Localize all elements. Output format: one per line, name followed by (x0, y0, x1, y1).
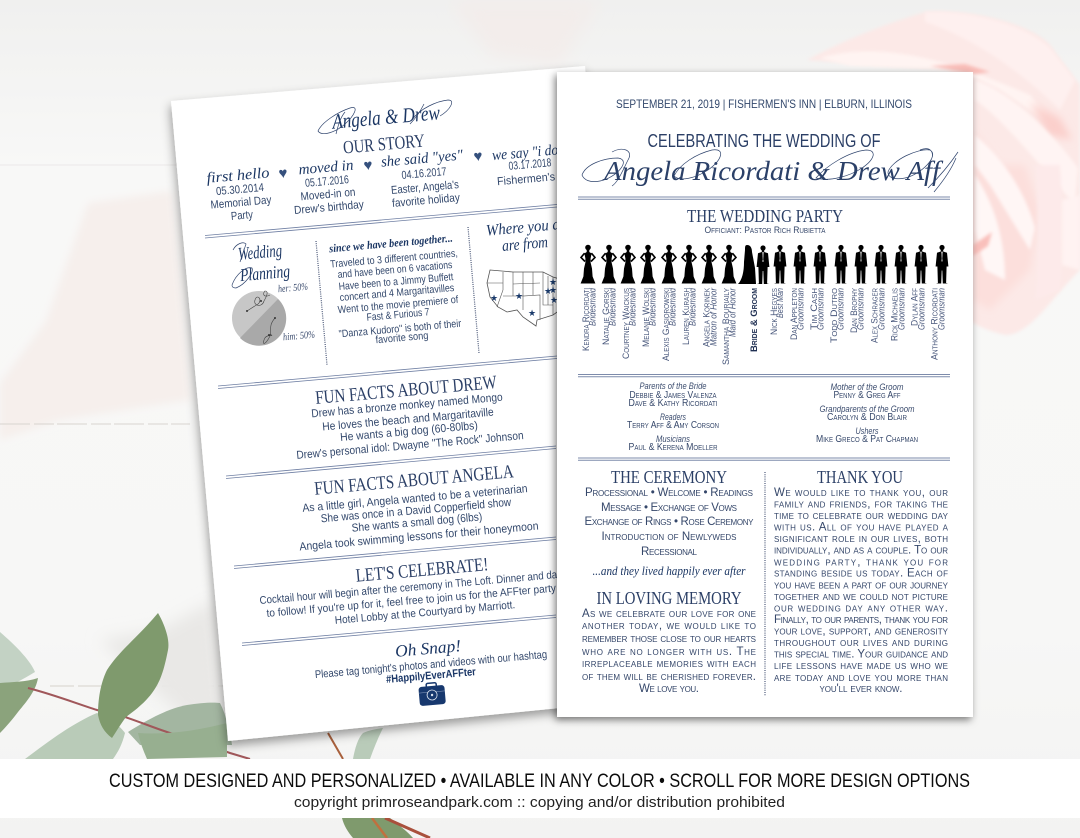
family and ushers right column: Mike Greco & Pat Chapman (816, 434, 918, 445)
panel: wedding planning (232, 240, 316, 346)
wedding party names: Samantha Bouriaily (721, 288, 732, 365)
panel: thank you: you'll ever know. (820, 683, 902, 695)
panel: thank you: THANK YOU (817, 467, 903, 487)
wedding party names: Groomsman (836, 288, 846, 330)
wedding party names: Todd Dutro (829, 287, 840, 343)
text block: fun facts about drew: He loves the beach and Margaritaville (322, 407, 494, 433)
text block: fun facts about angela: She wants a small dog (6lbs) (351, 511, 483, 535)
text block: oh snap hashtag: Oh Snap! (394, 636, 462, 661)
panel: the ceremony: Recessional (641, 546, 698, 558)
text block: fun facts about drew: FUN FACTS ABOUT DREW (314, 372, 498, 409)
milestone: moved in: Moved-in on (300, 187, 356, 203)
icon: camera (418, 682, 446, 706)
panel: thank you: standing beside us today. Each of (774, 568, 948, 580)
text block: since we have been together: Traveled to 3 different countries, (330, 247, 458, 271)
text block: fun facts about angela: FUN FACTS ABOUT ANGELA (313, 461, 515, 500)
panel: thank you: with us. All of you have played a (774, 522, 949, 534)
milestone: she said yes (380, 147, 464, 210)
panel: thank you: throughout our lives and during (774, 637, 948, 649)
panel: the ceremony: Exchange of Rings • Rose Ceremony (584, 516, 754, 528)
wedding party names: Maid of Honor (728, 287, 738, 337)
silhouette: bride (738, 245, 756, 284)
wedding party names: Groomsman (816, 288, 826, 330)
copyright line: copyright primroseandpark.com :: copying and/or distribution prohibited (294, 794, 785, 811)
family and ushers right column: Carolyn & Don Blair (827, 412, 907, 423)
text block: let's celebrate: to follow! If you're up for it, feel free to join us for the AFFter party in the (266, 580, 584, 620)
panel: thank you: wedding party, thank you for (774, 556, 948, 568)
officiant: Officiant: Pastor Rich Rubietta (704, 225, 826, 236)
pink rose (807, 11, 1080, 335)
wedding party names: Groomsman (896, 288, 906, 330)
wedding party names: Alexis Gasiorowski (661, 288, 672, 361)
family and ushers right column: Penny & Greg Aff (834, 390, 900, 401)
text block: fun facts about angela (299, 461, 539, 553)
wedding party names: Groomsman (876, 288, 886, 330)
milestone: she said yes: she said "yes" (380, 147, 464, 171)
panel: the ceremony (584, 467, 754, 578)
milestone: moved in: Drew's birthday (294, 199, 365, 217)
panel: the ceremony: Processional • Welcome • Readings (585, 487, 753, 499)
panel: thank you: significant role in our lives, both (774, 533, 948, 545)
panel: thank you: life lessons have made us who we (774, 660, 948, 672)
family and readers left column (627, 381, 719, 453)
panel: in loving memory: remember those close to our hearts (582, 633, 756, 645)
heading: Angela & Drew: Angela & Drew (330, 100, 441, 134)
text block: let's celebrate (259, 554, 584, 627)
script names: Angela Ricordati & Drew Aff (602, 156, 944, 186)
family and readers left column: Terry Aff & Amy Corson (627, 420, 719, 431)
wedding party names: Anthony Ricordati (930, 288, 940, 360)
wedding party names: Matron of Honor (708, 287, 718, 346)
milestone: she said yes: favorite holiday (392, 192, 461, 210)
wedding party names: Angela Korinek (702, 288, 712, 347)
panel: in loving memory: who are no longer with us. The (582, 646, 756, 658)
milestone: first hello: first hello (206, 165, 271, 187)
milestone: first hello: Memorial Day (210, 194, 272, 212)
wedding party names: Dan Appleton (789, 288, 800, 340)
milestone: first hello: Party (231, 209, 254, 223)
map: united states with stars: ★ (544, 286, 552, 296)
wedding party names: Groomsman (796, 288, 806, 330)
panel: thank you: our wedding day any other way. (774, 602, 948, 614)
milestone: first hello (206, 165, 272, 223)
pie label: him: him: 50% (283, 330, 316, 343)
heading: celebrating the wedding of: CELEBRATING THE WEDDING OF (648, 131, 880, 151)
wedding party silhouettes (581, 245, 948, 284)
family and readers left column: Paul & Kerena Moeller (628, 442, 718, 453)
milestone: we say i do: we say "i do" (491, 142, 565, 164)
panel: the ceremony: Message • Exchange of Vows (601, 502, 737, 514)
wedding party names: Lauren Kurash (681, 288, 692, 345)
panel: wedding program card (front) (557, 72, 973, 717)
panel: in loving memory: another today, we would like to (582, 620, 756, 632)
wedding party names: Groomsman (936, 288, 946, 330)
wedding party names: Melanie Wolski (641, 288, 652, 347)
text block: let's celebrate: LET'S CELEBRATE! (355, 554, 489, 587)
wedding party names: Groomsman (916, 288, 926, 330)
wedding party names: Bridesmaid (688, 287, 698, 326)
milestone: first hello: 05.30.2014 (216, 182, 265, 198)
icon: heart: ♥ (473, 148, 483, 165)
text block: fun facts about drew: Drew has a bronze monkey named Mongo (311, 392, 503, 420)
wedding party names: Bridesmaid (588, 287, 598, 326)
panel: our story card (back) (171, 66, 640, 741)
wedding party names: Bridesmaid (628, 287, 638, 326)
text block: since we have been together (328, 233, 462, 346)
heading: wedding planning: Planning (238, 261, 291, 285)
panel: in loving memory: As we celebrate our love for one (582, 608, 756, 620)
milestone: she said yes: 04.16.2017 (401, 166, 447, 182)
text block: fun facts about angela: Angela took swimming lessons for their honeymoon (299, 521, 539, 553)
wedding party names: Bridesmaid (648, 287, 658, 326)
timeline (206, 142, 573, 223)
family and readers left column: Musicians (656, 434, 690, 445)
wedding party names: Groomsman (856, 288, 866, 330)
text block: oh snap hashtag: #HappilyEverAFFter (386, 666, 477, 686)
panel: thank you: are today and love you more than (774, 672, 948, 684)
text block: oh snap hashtag (314, 636, 548, 686)
text block: fun facts about angela: As a little girl, Angela wanted to be a veterinarian (302, 483, 528, 515)
wedding party names: Best Man (775, 288, 785, 318)
text block: fun facts about drew (296, 372, 524, 462)
family and ushers right column: Mother of the Groom (830, 382, 904, 393)
wedding party names: Bridesmaid (608, 287, 618, 326)
text block: since we have been together: "Danza Kudoro" is both of their (338, 318, 462, 340)
script names (582, 149, 958, 192)
map: united states with stars (487, 270, 567, 326)
heading: wedding planning: Wedding (237, 240, 283, 264)
family and readers left column: Debbie & James Valenza (630, 390, 717, 401)
map: united states with stars: ★ (549, 277, 557, 287)
text block: since we have been together: and have been on 6 vacations (337, 259, 453, 281)
family and readers left column: Parents of the Bride (640, 381, 706, 392)
panel: where you all are from (485, 215, 569, 326)
text block: since we have been together: concert and 4 Margaritavilles (339, 282, 455, 304)
date and venue line: SEPTEMBER 21, 2019 | FISHERMEN'S INN | ELBURN, ILLINOIS (616, 97, 912, 111)
panel: the ceremony: ...and they lived happily ever after (592, 564, 746, 578)
wedding party names: Dan Brophy (849, 288, 860, 333)
text block: since we have been together: Went to the movie premiere of (337, 294, 459, 316)
family and ushers right column: Ushers (856, 426, 879, 437)
panel: thank you: individually, and as a couple. To our (774, 544, 948, 556)
text block: oh snap hashtag: Please tag tonight's photos and videos with our hashtag (314, 649, 548, 681)
icon: heart: ♥ (363, 157, 373, 174)
heading: wedding planning (232, 240, 291, 288)
eucalyptus leaves and stems (0, 613, 430, 838)
panel: in loving memory: We love you. (639, 683, 699, 695)
family and ushers right column: Grandparents of the Groom (820, 404, 915, 415)
panel: thank you: time to celebrate our wedding day (774, 510, 949, 522)
text block: since we have been together: Fast & Furious 7 (366, 306, 430, 324)
panel: thank you: We would like to thank you, our (774, 487, 948, 499)
map: united states with stars: ★ (550, 295, 558, 305)
panel: thank you: you have been a part of our journey (774, 579, 949, 591)
panel: thank you (774, 467, 949, 695)
panel: where you all are from: Where you all (485, 215, 569, 240)
heading: the wedding party: THE WEDDING PARTY (687, 206, 843, 226)
wedding party names: Alex Schrager (870, 288, 880, 343)
milestone: moved in: 05.17.2016 (305, 174, 349, 190)
text block: fun facts about angela: She was once in a David Copperfield show (320, 497, 512, 525)
panel: thank you: family and friends, for taking the (774, 498, 948, 510)
panel: in loving memory: of them will be cherished forever. (582, 671, 756, 683)
text block: since we have been together: favorite song (375, 330, 429, 346)
wedding party names: Bridesmaid (668, 287, 678, 326)
wedding party names: Courtney Waickus (621, 288, 632, 359)
icon: heart: ♥ (278, 165, 288, 182)
banner (0, 759, 1080, 818)
milestone: we say i do (491, 142, 573, 188)
heading: our story: OUR STORY (342, 131, 426, 159)
pie chart: her and him 50 percent (232, 291, 286, 346)
family and ushers right column (816, 382, 918, 445)
map: united states with stars: ★ (528, 308, 536, 318)
wedding party names: Kendra Ricordati (581, 288, 592, 351)
milestone: we say i do: Fishermen's Inn (497, 170, 573, 188)
wedding party names: Dylan Aff (910, 288, 920, 326)
text block: since we have been together: since we have been together... (328, 233, 453, 255)
pie label: her: her: 50% (278, 282, 309, 295)
milestone: she said yes: Easter, Angela's (391, 179, 460, 197)
panel: thank you: your love, support, and generosity (774, 626, 949, 638)
panel: the ceremony: Introduction of Newlyweds (602, 531, 736, 543)
map: united states with stars: ★ (515, 291, 523, 301)
milestone: moved in: moved in (298, 158, 354, 178)
family and readers left column: Readers (660, 412, 686, 423)
map: united states with stars: ★ (490, 293, 498, 303)
panel: in loving memory: irreplaceable memories with each (582, 658, 756, 670)
panel: in loving memory: IN LOVING MEMORY (596, 588, 742, 608)
milestone: moved in (294, 158, 365, 217)
panel: the ceremony: THE CEREMONY (611, 467, 727, 487)
panel: thank you: together and we could not picture (774, 591, 948, 603)
wedding party names: Rick Michaelis (890, 288, 900, 341)
wedding party names: Natalie Gorski (601, 288, 612, 345)
wedding party names: Nick Hegyes (769, 288, 780, 335)
text block: fun facts about drew: He wants a big dog (60-80lbs) (340, 420, 478, 444)
panel: thank you: Finally, to our parents, thank you for (774, 614, 948, 626)
wedding party names (581, 287, 946, 365)
text block: since we have been together: Have been to a Jimmy Buffett (338, 271, 454, 293)
text block: fun facts about drew: Drew's personal idol: Dwayne "The Rock" Johnson (296, 430, 524, 462)
text block: let's celebrate: Cocktail hour will begin after the ceremony in The Loft. Dinner and dancing (259, 567, 581, 607)
map: united states with stars: ★ (549, 285, 557, 295)
panel: thank you: this special time. Your guidance and (774, 648, 948, 660)
family and readers left column: Dave & Kathy Ricordati (628, 398, 718, 409)
milestone: we say i do: 03.17.2018 (508, 157, 552, 173)
panel: in loving memory (582, 588, 756, 695)
panel: where you all are from: are from (501, 234, 549, 255)
wedding party names: Tim Cash (809, 288, 820, 330)
text block: let's celebrate: Hotel Lobby at the Courtyard by Marriott. (334, 599, 516, 627)
wedding party names: Bride & Groom (749, 288, 760, 352)
